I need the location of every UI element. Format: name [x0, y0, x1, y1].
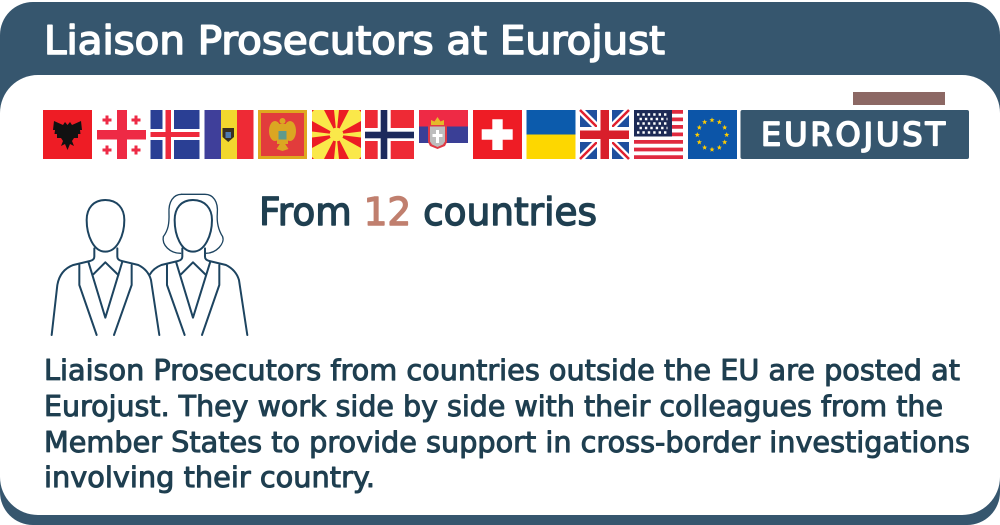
body text: involving their country.: [44, 461, 375, 494]
body text: Liaison Prosecutors from countries outside the EU are posted at: [44, 354, 960, 387]
body text: [44, 354, 970, 494]
flag: United Kingdom: [580, 110, 629, 159]
flag: Norway: [365, 110, 414, 159]
logo: Eurojust: EUROJUST: [761, 116, 945, 154]
flag: Switzerland: [473, 110, 522, 159]
decorative brown bar: [853, 92, 945, 105]
flag: North Macedonia: [312, 110, 361, 159]
flag: Ukraine: [526, 110, 576, 159]
flag: Moldova: [204, 110, 254, 159]
title: Liaison Prosecutors at Eurojust: [44, 18, 665, 64]
flag: United States: [634, 110, 683, 159]
icon: two prosecutors: [52, 194, 247, 335]
flag: Iceland: [150, 110, 200, 159]
flag: Serbia: [419, 110, 468, 149]
icon: female figure: [150, 194, 247, 335]
flag: Albania: [43, 110, 92, 159]
logo: Eurojust: [740, 110, 969, 159]
body text: Member States to provide support in cross-border investigations: [44, 426, 970, 459]
body text: Eurojust. They work side by side with their colleagues from the: [44, 390, 943, 423]
heading: from 12 countries: From 12 countries: [259, 190, 597, 234]
icon: male figure: [52, 200, 159, 335]
flag: Georgia: [97, 110, 146, 159]
flag: European Union: [688, 110, 737, 159]
flags row: [43, 110, 737, 159]
flag: Montenegro: [258, 110, 307, 159]
